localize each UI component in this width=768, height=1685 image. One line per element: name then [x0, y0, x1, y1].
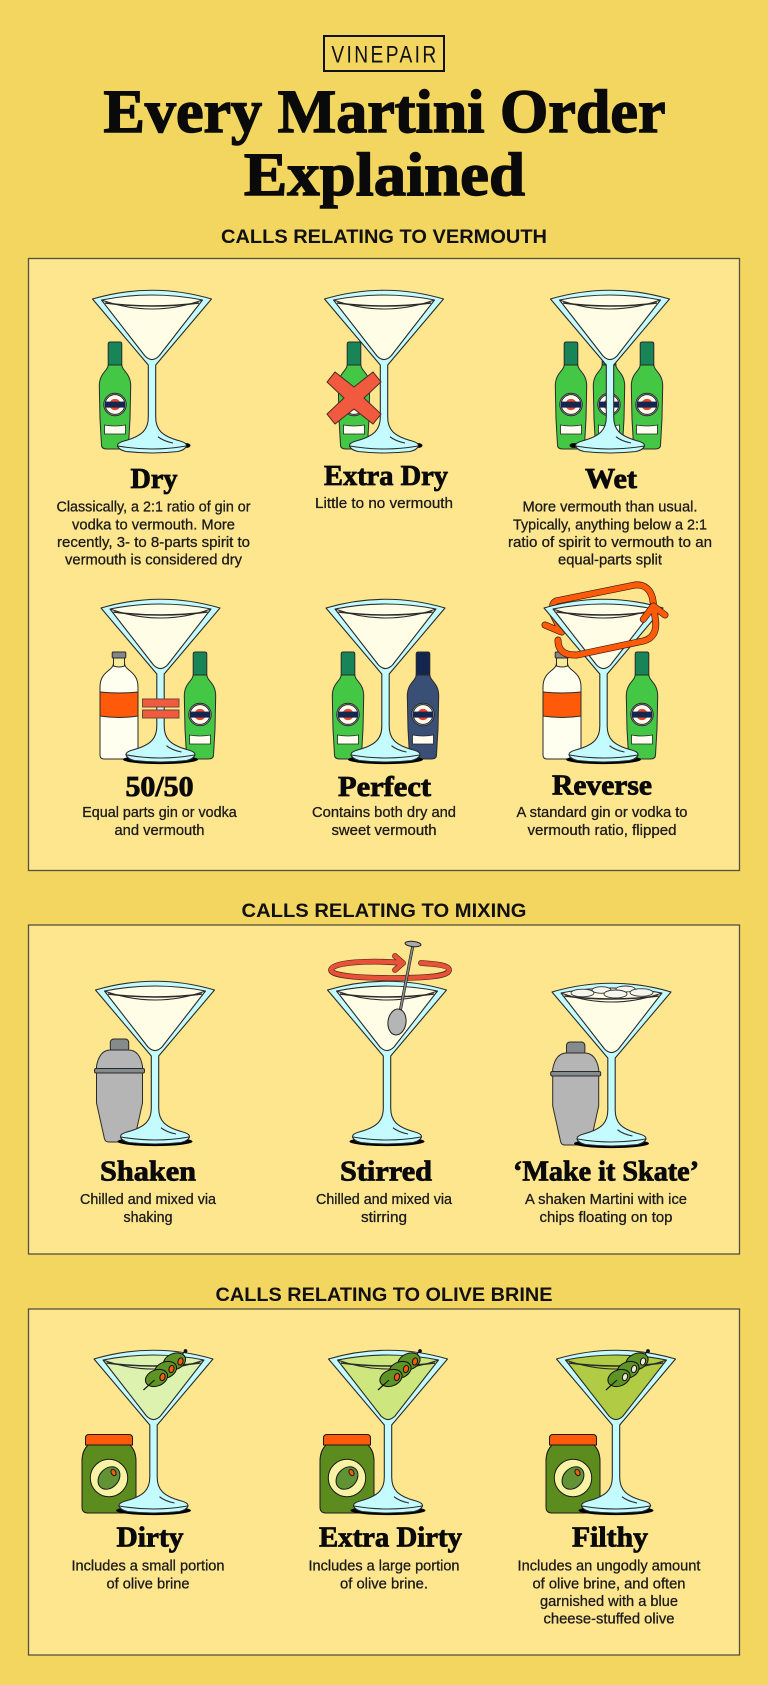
icon: vermouth bottle	[99, 342, 131, 449]
icon: base shadow	[350, 1137, 424, 1146]
icon: martini glass	[96, 981, 214, 1144]
item: Extra Dry	[315, 290, 453, 512]
text: Dry description: vermouth is considered dry	[65, 552, 243, 568]
panel: mixing	[28, 925, 740, 1254]
icon: base shadow	[350, 1506, 426, 1515]
icon: martini glass	[92, 290, 212, 453]
icon: martini glass	[324, 290, 444, 453]
icon: martini glass	[328, 1350, 448, 1513]
icon: shadow tip	[414, 443, 422, 448]
text: Perfect description	[312, 805, 456, 839]
logo: VinePair: VINEPAIR	[331, 40, 439, 68]
icon: martini glass	[556, 1350, 676, 1513]
text: Perfect description: Contains both dry and	[312, 805, 456, 821]
text: Stirred description: stirring	[361, 1210, 407, 1226]
text: Perfect description: sweet vermouth	[332, 823, 436, 839]
heading: Make it Skate: ‘Make it Skate’	[513, 1156, 699, 1188]
panel: vermouth	[28, 258, 740, 870]
text: Extra Dry description: Little to no vermouth	[315, 496, 453, 512]
text: 50/50 description	[82, 805, 238, 839]
text: Reverse description: vermouth ratio, flipped	[528, 823, 676, 839]
heading: Extra Dry: Extra Dry	[324, 461, 448, 492]
icon: vermouth bottle	[626, 652, 658, 759]
heading: Reverse: Reverse	[552, 770, 652, 802]
text: Filthy description: garnished with a blue	[540, 1594, 678, 1610]
text: Extra Dirty description: of olive brine.	[340, 1576, 428, 1592]
heading: Stirred: Stirred	[340, 1156, 432, 1188]
text: Stirred description: Chilled and mixed via	[316, 1192, 453, 1208]
heading: mixing calls: CALLS RELATING TO MIXING	[242, 901, 526, 922]
icon: cocktail shaker	[94, 1039, 144, 1142]
panel: olive brine	[28, 1309, 740, 1655]
arrow: stirring ring	[331, 956, 449, 978]
item: Extra Dirty	[308, 1350, 462, 1592]
text: Wet description: Typically, anything below a 2:1	[513, 517, 707, 533]
icon: base shadow	[123, 755, 198, 764]
text: Shaken description: shaking	[124, 1210, 172, 1226]
icon: shadow tip	[182, 443, 190, 448]
heading: 50/50: 50/50	[126, 772, 194, 803]
heading: Extra Dirty: Extra Dirty	[319, 1522, 462, 1554]
text: Make it Skate description: chips floating on top	[540, 1210, 672, 1226]
icon: ice chips	[571, 986, 653, 998]
heading: olive brine calls: CALLS RELATING TO OLIVE BRINE	[216, 1285, 552, 1306]
item: Perfect	[312, 599, 456, 839]
heading: vermouth calls: CALLS RELATING TO VERMOUTH	[221, 227, 547, 248]
icon: base shadow	[566, 755, 641, 764]
icon: blue-cheese olive garnish	[605, 1350, 651, 1390]
heading: Dry: Dry	[130, 464, 178, 495]
title: Every Martini Order	[104, 79, 666, 146]
icon: cocktail shaker	[551, 1042, 601, 1145]
heading: Wet: Wet	[585, 464, 638, 495]
icon: olive garnish	[377, 1350, 423, 1390]
item: Shaken	[80, 981, 217, 1226]
icon: martini glass	[550, 290, 670, 453]
text: Reverse description	[516, 805, 688, 839]
icon: shadow tip	[570, 443, 578, 448]
icon: vermouth bottle	[338, 342, 370, 449]
icon: red cross	[327, 372, 381, 424]
text: Extra Dirty description	[308, 1559, 460, 1592]
icon: martini glass	[101, 599, 220, 762]
icon: olive jar	[546, 1434, 600, 1513]
icon: martini glass	[326, 599, 445, 762]
text: Dirty description: Includes a small portion	[72, 1559, 224, 1575]
icon: base shadow	[574, 1139, 649, 1148]
icon: gin bottle	[100, 652, 138, 759]
arrow: back half of swap loop	[545, 585, 653, 632]
text: Dry description: Classically, a 2:1 ratio of gin or	[56, 500, 251, 516]
item: Dirty	[72, 1350, 224, 1592]
heading: Shaken: Shaken	[100, 1156, 196, 1188]
text: 50/50 description: Equal parts gin or vodka	[82, 805, 238, 821]
item: Wet	[508, 290, 712, 568]
text: Filthy description: Includes an ungodly amount	[518, 1559, 700, 1575]
text: Dry description	[56, 500, 251, 568]
arrow: front half of swap loop	[558, 606, 665, 655]
icon: base shadow	[348, 755, 423, 764]
icon: bar spoon	[386, 941, 421, 1036]
item: Stirred	[316, 941, 453, 1226]
text: Make it Skate description	[525, 1192, 687, 1226]
icon: base shadow	[578, 1506, 654, 1515]
text: Wet description: equal-parts split	[558, 552, 662, 568]
item: Dry	[56, 290, 251, 568]
text: Filthy description: of olive brine, and often	[532, 1576, 686, 1592]
icon: olive garnish	[143, 1350, 188, 1390]
icon: martini glass	[544, 599, 663, 762]
item: 50/50	[82, 599, 238, 839]
icon: olive jar	[82, 1434, 136, 1513]
text: Extra Dirty description: Includes a large portion	[308, 1559, 460, 1575]
text: Wet description	[508, 500, 712, 568]
text: Filthy description	[518, 1559, 700, 1628]
item: Reverse	[516, 585, 688, 839]
title: Explained	[244, 142, 525, 209]
heading: Dirty: Dirty	[116, 1522, 184, 1554]
text: Make it Skate description: A shaken Martini with ice	[525, 1192, 687, 1208]
text: Shaken description	[80, 1192, 217, 1226]
icon: dry vermouth bottle	[332, 652, 364, 759]
text: Reverse description: A standard gin or vodka to	[516, 805, 688, 821]
text: 50/50 description: and vermouth	[114, 823, 204, 839]
text: Dry description: vodka to vermouth. More	[72, 517, 235, 533]
icon: three vermouth bottles	[555, 342, 663, 449]
icon: martini glass	[328, 981, 446, 1144]
heading: Perfect: Perfect	[338, 772, 432, 803]
text: Shaken description: Chilled and mixed via	[80, 1192, 217, 1208]
text: Stirred description	[316, 1192, 453, 1226]
text: Wet description: ratio of spirit to vermouth to an	[508, 535, 712, 551]
icon: equals sign	[142, 699, 179, 718]
icon: olive jar	[320, 1434, 374, 1513]
icon: martini glass	[94, 1350, 213, 1513]
text: Filthy description: cheese-stuffed olive	[544, 1612, 674, 1628]
text: Dirty description	[72, 1559, 224, 1592]
icon: base shadow	[116, 1506, 191, 1515]
text: Wet description: More vermouth than usual.	[522, 500, 698, 516]
title	[104, 79, 666, 209]
item: Filthy	[518, 1350, 700, 1628]
text: Dirty description: of olive brine	[106, 1576, 190, 1592]
icon: sweet vermouth bottle	[407, 652, 439, 759]
heading: Filthy: Filthy	[572, 1522, 648, 1554]
icon: gin bottle	[543, 652, 581, 759]
icon: vermouth bottle	[184, 652, 216, 759]
item: Make it Skate	[513, 983, 699, 1226]
text: Dry description: recently, 3- to 8-parts spirit to	[57, 535, 250, 551]
icon: base shadow	[118, 1137, 192, 1146]
icon: martini glass	[552, 983, 671, 1146]
